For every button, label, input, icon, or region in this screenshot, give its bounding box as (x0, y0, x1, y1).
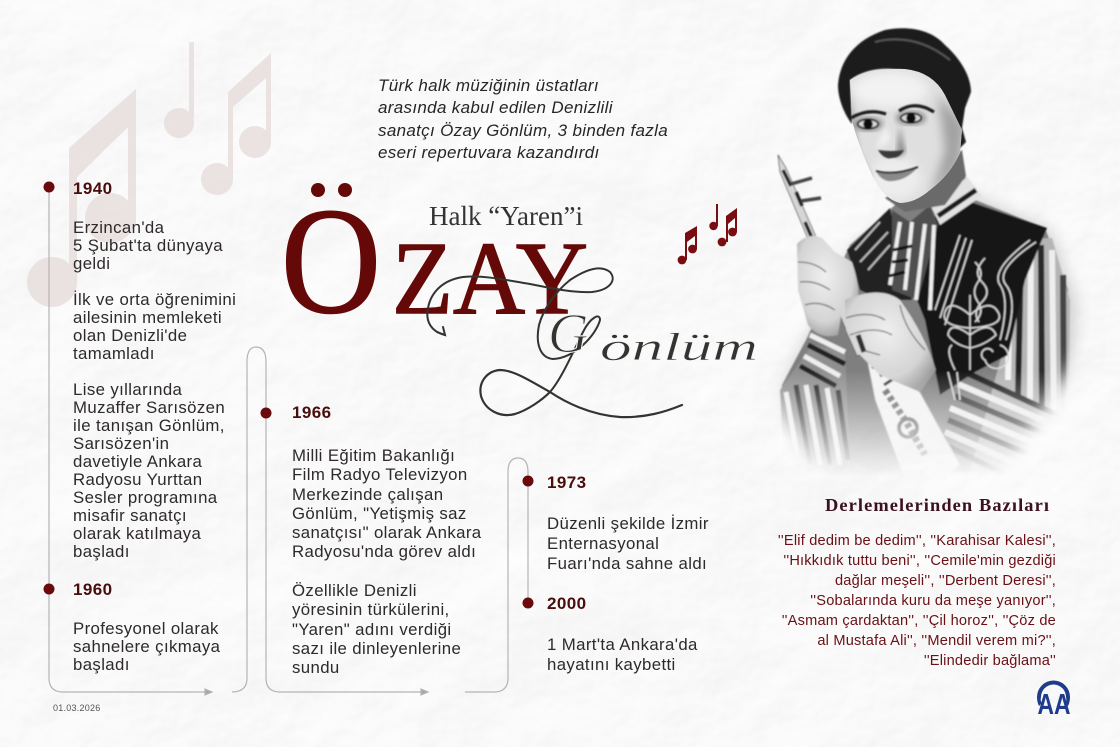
intro text: arasında kabul edilen Denizlili (378, 98, 613, 117)
hands (797, 236, 858, 336)
text: birth and schooling: Lise yıllarında (73, 380, 182, 399)
text: birth and schooling: Erzincan'da (73, 218, 164, 237)
text: birth and schooling: Radyosu Yurttan (73, 470, 202, 489)
text: Izmir fair: Fuarı'nda sahne aldı (547, 554, 707, 573)
script name: Gönlüm: önlüm (600, 326, 758, 369)
intro text (378, 76, 668, 162)
subtitle: Halk “Yaren”i (429, 201, 583, 231)
text: birth and schooling: olarak katılmaya (73, 524, 201, 543)
text: death (547, 635, 698, 674)
text: radio career: Merkezinde çalışan (292, 485, 443, 504)
text: birth and schooling: geldi (73, 254, 110, 273)
text: birth and schooling: Sesler programına (73, 488, 218, 507)
text: death: hayatını kaybetti (547, 655, 676, 674)
list of compiled songs: ''Elindedir bağlama'' (924, 653, 1056, 669)
left sleeve (779, 346, 847, 423)
text: birth and schooling: 5 Şubat'ta dünyaya (73, 236, 223, 255)
year 1966: 1966 (292, 403, 331, 422)
text: radio career: sundu (292, 658, 340, 677)
text: birth and schooling: ailesinin memleketi (73, 308, 222, 327)
saz body (867, 362, 959, 468)
nose (878, 150, 904, 158)
collar and front placket (930, 176, 979, 226)
list of compiled songs: ''Asmam çardaktan'', ''Çil horoz'', ''Çöz de (782, 613, 1056, 629)
text: birth and schooling: Sarısözen'in (73, 434, 169, 453)
AA agency logo: AA (1038, 689, 1071, 721)
script flourish (427, 268, 682, 417)
halo shading (778, 191, 1083, 400)
text: birth and schooling: başladı (73, 542, 130, 561)
text: radio career (292, 446, 482, 677)
script name: Gönlüm: G (548, 303, 588, 365)
text: professional stage: Profesyonel olarak (73, 619, 219, 638)
text: Izmir fair (547, 514, 709, 573)
text: birth and schooling: İlk ve orta öğrenimini (73, 290, 236, 309)
year 1960: 1960 (73, 580, 112, 599)
hair (838, 28, 971, 150)
text: birth and schooling: Muzaffer Sarısözen (73, 398, 225, 417)
vest embroidery (935, 235, 1036, 400)
portrait of Özay Gönlüm holding a saz (776, 27, 1083, 471)
text: birth and schooling (73, 218, 236, 561)
face (850, 68, 962, 203)
list of compiled songs: al Mustafa Ali'', ''Mendil verem mi?'', (817, 633, 1056, 649)
text: birth and schooling: olan Denizli'de (73, 326, 187, 345)
text: professional stage: başladı (73, 655, 130, 674)
text: birth and schooling: davetiyle Ankara (73, 452, 202, 471)
list of compiled songs: ''Sobalarında kuru da meşe yanıyor'', (810, 593, 1056, 609)
intro text: Türk halk müziğinin üstatları (378, 76, 599, 95)
text: radio career: yöresinin türkülerini, (292, 600, 450, 619)
year 1973: 1973 (547, 473, 586, 492)
embroidered vest (916, 202, 1048, 395)
list of compiled songs (778, 533, 1056, 669)
year 2000: 2000 (547, 594, 586, 613)
timeline column 1 (73, 179, 236, 674)
title block (286, 183, 756, 418)
text: death: 1 Mart'ta Ankara'da (547, 635, 698, 654)
list of compiled songs: dağlar meşeli'', ''Derbent Deresi'', (835, 573, 1056, 589)
text: radio career: Gönlüm, "Yetişmiş saz (292, 504, 467, 523)
text: radio career: Film Radyo Televizyon (292, 465, 468, 484)
eyebrows (851, 112, 886, 118)
intro text: eseri repertuvara kazandırdı (378, 143, 600, 162)
text: professional stage: sahnelere çıkmaya (73, 637, 220, 656)
saz neck and head (778, 155, 866, 356)
right sleeve stripes (975, 238, 1070, 460)
text: professional stage (73, 619, 220, 674)
text: radio career: Radyosu'nda görev aldı (292, 542, 476, 561)
text: radio career: Özellikle Denizli (292, 581, 417, 600)
saz ornament (885, 390, 925, 455)
text: radio career: "Yaren" adını verdiği (292, 620, 452, 639)
eyes (858, 120, 878, 128)
text: radio career: Milli Eğitim Bakanlığı (292, 446, 455, 465)
date: 01.03.2026 (53, 703, 101, 713)
text: Izmir fair: Enternasyonal (547, 534, 659, 553)
intro text: sanatçı Özay Gönlüm, 3 binden fazla (378, 121, 668, 140)
text: radio career: sanatçısı" olarak Ankara (292, 523, 482, 542)
mouth (876, 167, 918, 181)
heading: Derlemelerinden Bazıları: Derlemelerinden Bazıları (825, 495, 1050, 515)
list of compiled songs: ''Elif dedim be dedim'', ''Karahisar Kalesi'', (778, 533, 1056, 549)
timeline column 3 (547, 473, 709, 674)
list of compiled songs: ''Hıkkıdık tuttu beni'', ''Cemile'min gezdiği (783, 553, 1056, 569)
shirt base (781, 200, 1069, 466)
text: birth and schooling: misafir sanatçı (73, 506, 187, 525)
neck (885, 150, 966, 212)
text: birth and schooling: tamamladı (73, 344, 155, 363)
text: birth and schooling: ile tanışan Gönlüm, (73, 416, 225, 435)
year 1940: 1940 (73, 179, 112, 198)
big name: Özay: ZAY (392, 221, 588, 336)
timeline column 2 (292, 403, 482, 677)
big name: Özay (286, 183, 586, 314)
text: Izmir fair: Düzenli şekilde İzmir (547, 514, 709, 533)
big name: Özay: Ö (281, 177, 381, 345)
text: radio career: sazı ile dinleyenlerine (292, 639, 461, 658)
